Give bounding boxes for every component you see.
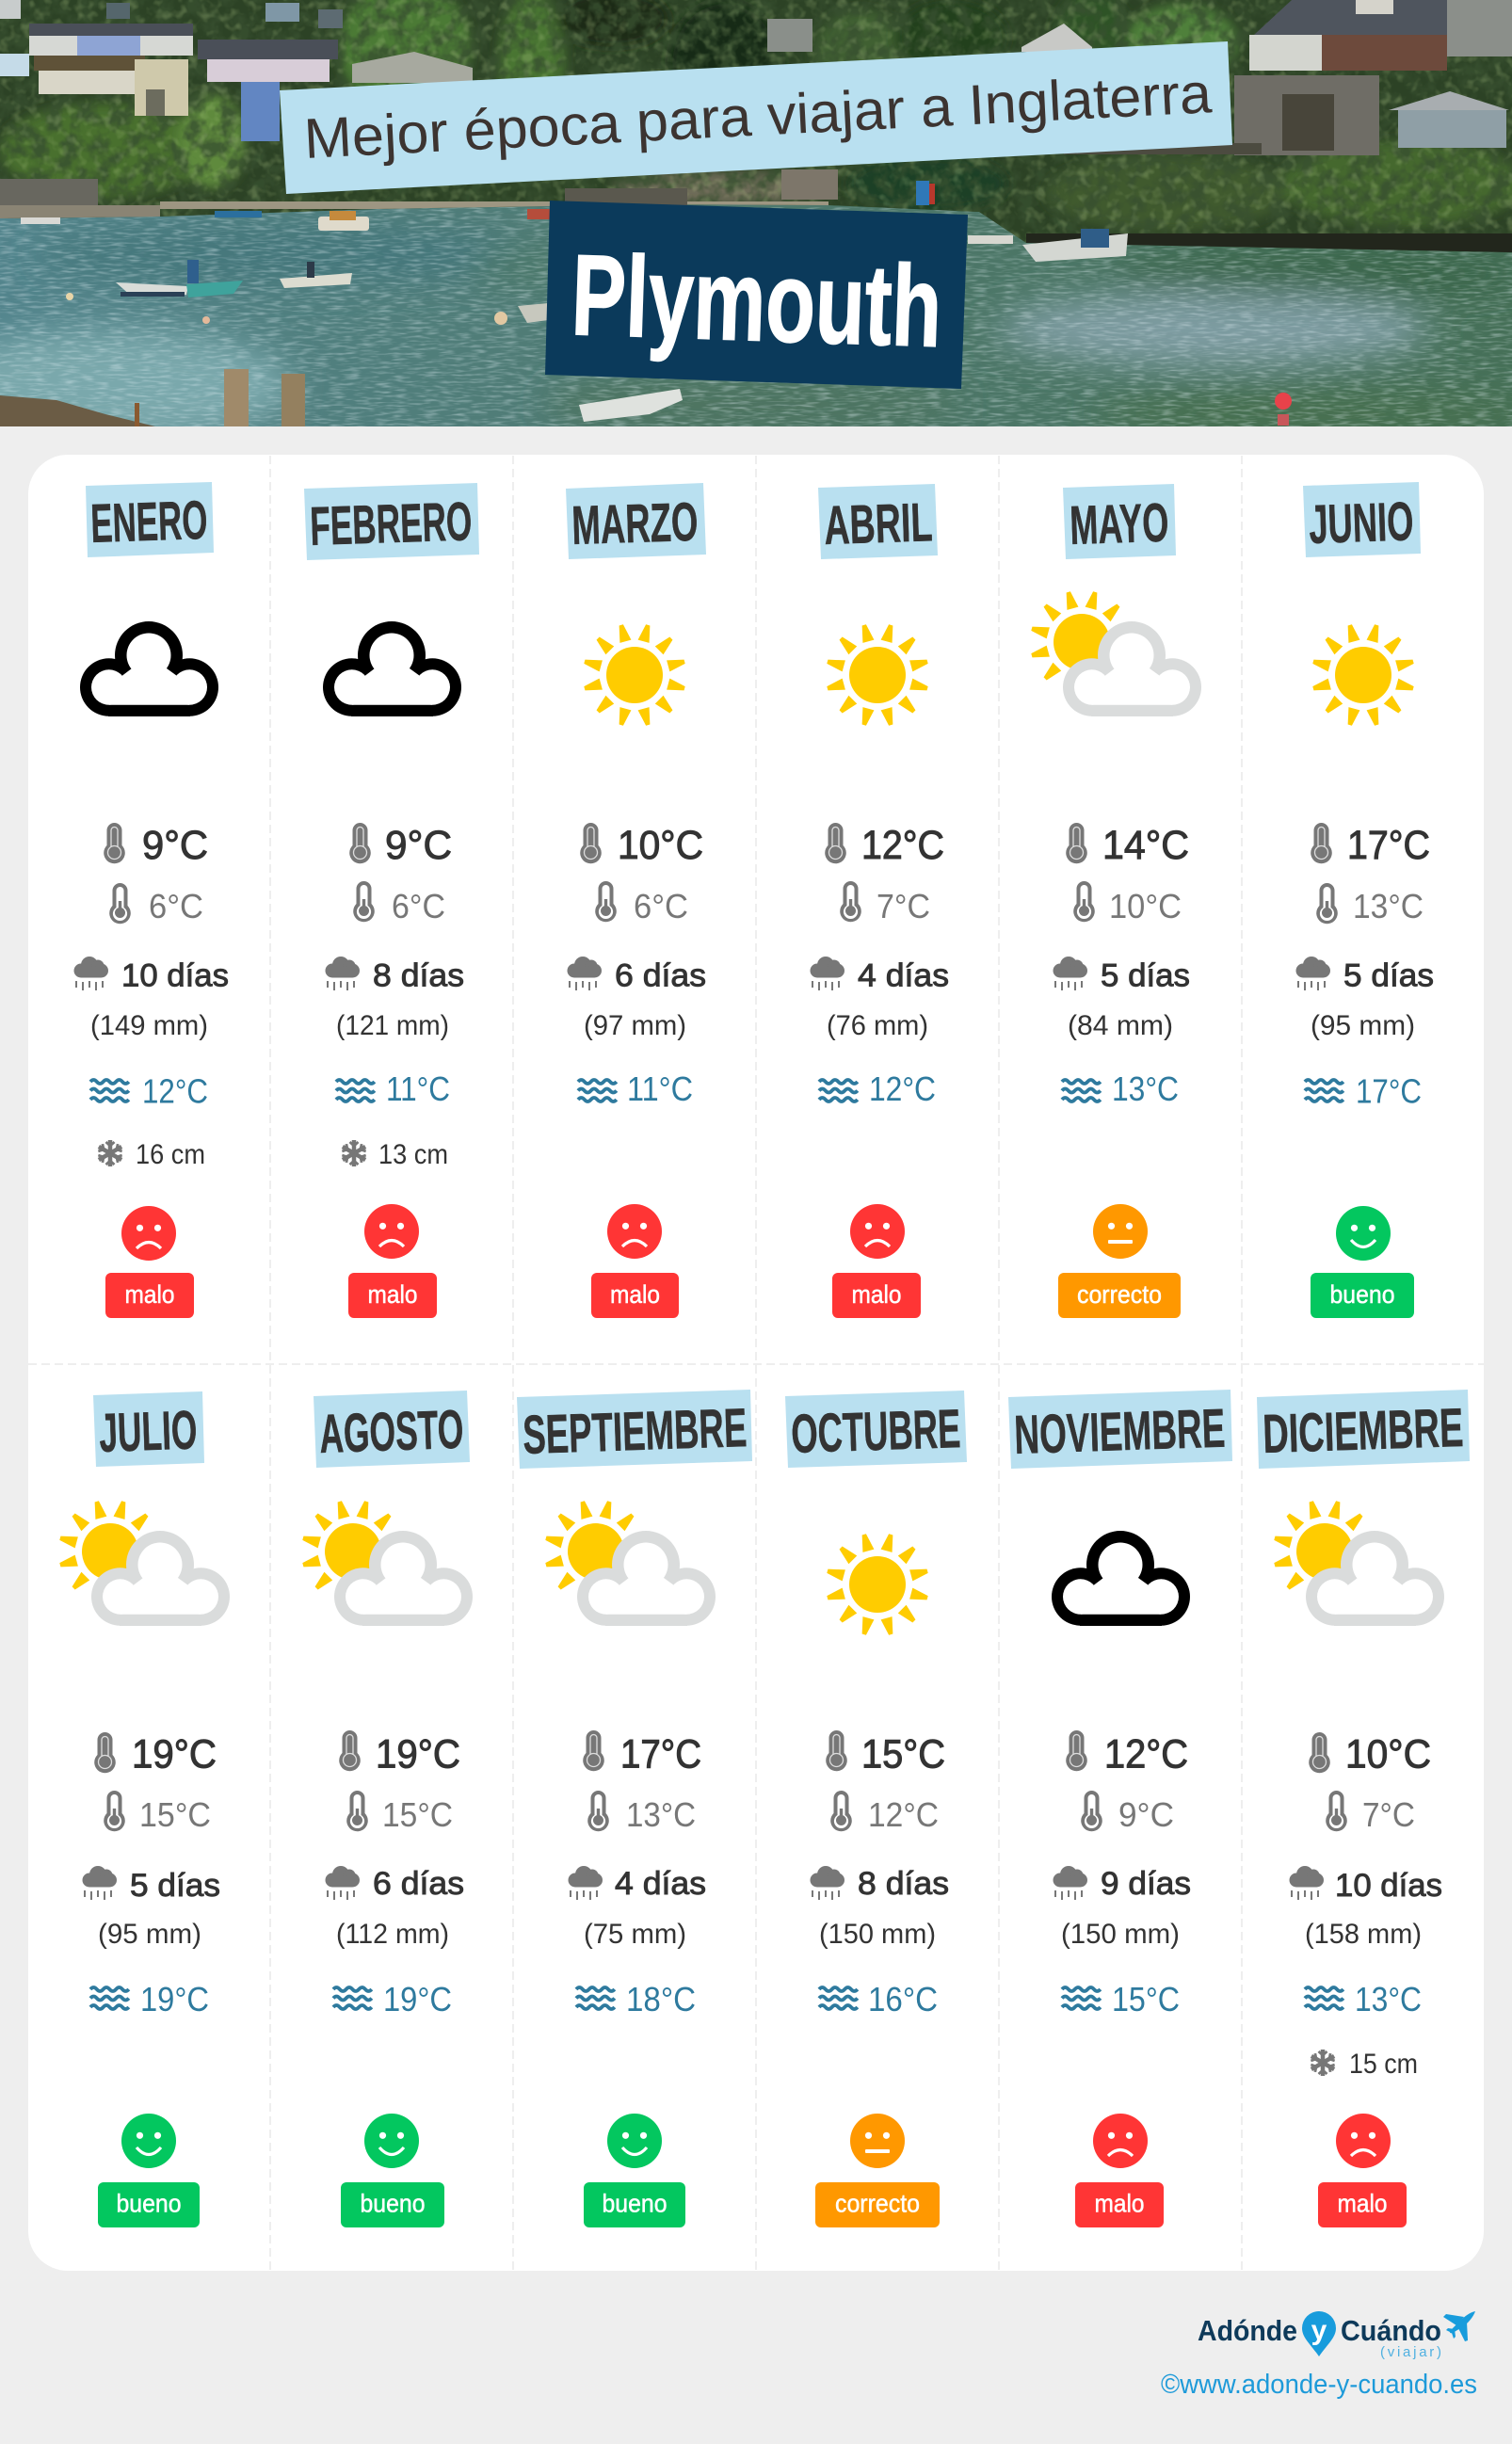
rainy days (567, 957, 706, 994)
min temperature (595, 881, 688, 925)
max temperature (94, 1732, 217, 1777)
panel: junio (1295, 482, 1434, 1318)
rainfall: (84 mm) (1068, 1010, 1173, 1041)
sea temperature (336, 1069, 450, 1108)
rating badge: bueno (584, 2182, 685, 2227)
rainfall: (76 mm) (827, 1010, 928, 1041)
icon: sun behind grey cloud (58, 1500, 230, 1626)
panel: enero (73, 482, 229, 1318)
footer logo: Adónde y Cuándo (viajar): (viajar) (1380, 2344, 1441, 2360)
rating face (1093, 1204, 1148, 1259)
max temperature: 9°C (142, 823, 208, 868)
sea temperature: 15°C (1112, 1980, 1180, 2018)
rainy days: 4 días (615, 1866, 706, 1902)
icon: airplane (1443, 2311, 1475, 2341)
right houses (1064, 0, 1512, 155)
month label: ENERO: ENERO (89, 490, 208, 555)
max temperature: 19°C (376, 1732, 460, 1777)
panel: septiembre (517, 1390, 752, 2227)
min temperature: 6°C (392, 887, 445, 925)
max temperature: 12°C (1104, 1732, 1188, 1777)
min temperature: 6°C (149, 887, 203, 925)
max temperature: 15°C (861, 1732, 945, 1777)
icon: location pin with y (1302, 2311, 1336, 2356)
rating face (607, 1204, 662, 1259)
min temperature: 12°C (868, 1795, 939, 1834)
icon: sun (826, 623, 929, 727)
rainy days: 6 días (615, 958, 706, 994)
month label: OCTUBRE: OCTUBRE (790, 1398, 961, 1465)
hero photo: harbour with boats and houses (0, 0, 1512, 442)
month label: OCTUBRE (785, 1391, 967, 1468)
min temperature: 7°C (1362, 1795, 1415, 1834)
rainy days (83, 1866, 220, 1904)
max temperature: 17°C (1347, 823, 1430, 868)
month label: JULIO: JULIO (98, 1399, 198, 1464)
month label: AGOSTO: AGOSTO (318, 1399, 464, 1465)
month label: NOVIEMBRE (1008, 1390, 1232, 1469)
rating badge: malo: malo (1337, 2190, 1388, 2218)
rainfall: (158 mm) (1305, 1919, 1422, 1950)
max temperature (1311, 823, 1430, 868)
min temperature (1073, 881, 1182, 925)
footer logo: Adónde y Cuándo (viajar) (1198, 2311, 1475, 2360)
footer logo: Adónde y Cuándo (viajar): Cuándo (1341, 2314, 1441, 2347)
max temperature (825, 823, 944, 868)
sea temperature: 19°C (140, 1980, 209, 2018)
icon: sun (1311, 623, 1415, 727)
rating badge: correcto (815, 2182, 940, 2227)
rating badge: malo: malo (851, 1280, 902, 1309)
rating badge: malo (348, 1273, 437, 1318)
sea temperature: 12°C (142, 1071, 208, 1111)
rating face (1336, 2114, 1391, 2168)
rating face (850, 1204, 905, 1259)
max temperature (1309, 1732, 1431, 1777)
rating badge: bueno (341, 2182, 444, 2227)
sea temperature: 12°C (869, 1069, 936, 1108)
month label: MARZO (566, 483, 706, 559)
sea temperature (819, 1980, 938, 2018)
snow: 13 cm (378, 1139, 448, 1170)
rating badge: malo (1075, 2182, 1164, 2227)
rating badge: malo: malo (124, 1280, 175, 1309)
rating badge: bueno (98, 2182, 200, 2227)
min temperature: 13°C (626, 1795, 696, 1834)
snow (341, 1139, 448, 1170)
sea temperature: 13°C (1112, 1069, 1179, 1108)
month label: SEPTIEMBRE (517, 1390, 752, 1469)
snow: 15 cm (1349, 2049, 1418, 2080)
rating badge: malo: malo (1094, 2190, 1145, 2218)
min temperature (1081, 1791, 1174, 1834)
rainy days (326, 1866, 464, 1902)
rainy days (810, 1866, 949, 1902)
rating badge: correcto: correcto (1077, 1280, 1162, 1309)
main white calendar panel (28, 455, 1484, 2271)
max temperature (1066, 823, 1189, 868)
rating face (607, 2114, 662, 2168)
sea temperature: 11°C (627, 1069, 693, 1108)
min temperature: 7°C (877, 887, 930, 925)
sea temperature (1305, 1980, 1422, 2018)
sea temperature: 13°C (1355, 1980, 1422, 2018)
boats and moorings (0, 209, 1292, 426)
icon: sun (583, 623, 686, 727)
rating badge: correcto (1058, 1273, 1181, 1318)
month label: JUNIO (1303, 482, 1421, 557)
rainy days (1053, 1866, 1191, 1902)
month label: MAYO (1063, 484, 1176, 559)
rainy days (326, 957, 464, 994)
rainy days: 5 días (130, 1868, 220, 1904)
rating badge: bueno: bueno (1329, 1280, 1395, 1309)
city banner: Plymouth (545, 201, 968, 389)
sea temperature (578, 1069, 693, 1108)
icon: location pin with y: y (1311, 2315, 1327, 2346)
sea temperature (1305, 1071, 1422, 1111)
min temperature: 15°C (382, 1795, 453, 1834)
min temperature: 6°C (634, 887, 688, 925)
rating face (121, 1206, 176, 1261)
rainy days: 10 días (121, 958, 229, 994)
panel: julio (58, 1391, 230, 2227)
min temperature: 15°C (139, 1795, 211, 1834)
icon: black cloud (80, 621, 218, 716)
rating badge: malo (832, 1273, 921, 1318)
rating face (1093, 2114, 1148, 2168)
icon: sun behind grey cloud (1273, 1500, 1444, 1626)
month label: NOVIEMBRE: NOVIEMBRE (1013, 1398, 1226, 1466)
max temperature (826, 1730, 945, 1777)
min temperature: 9°C (1118, 1795, 1174, 1834)
rainy days: 8 días (858, 1866, 949, 1902)
icon: sun behind grey cloud (1030, 590, 1201, 716)
panel: diciembre (1257, 1390, 1470, 2227)
sea temperature: 18°C (626, 1980, 696, 2018)
rainy days: 8 días (373, 958, 464, 994)
month label: MARZO: MARZO (571, 491, 699, 556)
rainy days (1053, 957, 1190, 994)
snow: 16 cm (136, 1139, 205, 1170)
month label: ENERO (86, 482, 214, 557)
footer logo: Adónde y Cuándo (viajar): Adónde (1198, 2314, 1297, 2347)
panel: febrero (304, 483, 479, 1318)
rating badge: correcto: correcto (835, 2190, 920, 2218)
panel: marzo (566, 483, 706, 1318)
max temperature: 12°C (861, 823, 944, 868)
month label: AGOSTO (314, 1391, 470, 1468)
panel: agosto (301, 1391, 473, 2227)
max temperature: 10°C (618, 823, 703, 868)
rainy days: 4 días (858, 958, 949, 994)
sea temperature: 17°C (1356, 1071, 1422, 1111)
rainy days: 10 días (1335, 1868, 1442, 1904)
panel: mayo (1030, 484, 1201, 1318)
sea temperature: 11°C (386, 1069, 450, 1108)
rating badge: malo (591, 1273, 679, 1318)
max temperature (583, 1730, 701, 1777)
month label: JULIO (93, 1391, 204, 1467)
min temperature: 10°C (1109, 887, 1182, 925)
max temperature (339, 1730, 460, 1777)
rating face (850, 2114, 905, 2168)
min temperature (346, 1791, 453, 1834)
rainy days: 6 días (373, 1866, 464, 1902)
month label: FEBRERO (304, 483, 479, 560)
month label: MAYO: MAYO (1069, 492, 1169, 556)
rainy days (810, 957, 949, 994)
title banner: Mejor época para viajar a Inglaterra: Mejor época para viajar a Inglaterra (302, 61, 1214, 170)
rainfall: (112 mm) (336, 1919, 449, 1950)
rating face (1336, 1206, 1391, 1261)
rating badge: bueno: bueno (360, 2190, 426, 2218)
sea temperature (576, 1980, 696, 2018)
max temperature: 10°C (1345, 1732, 1431, 1777)
month label: ABRIL (818, 484, 938, 559)
max temperature (580, 823, 703, 868)
rainfall: (150 mm) (1061, 1919, 1180, 1950)
max temperature (104, 823, 208, 868)
rainfall: (97 mm) (584, 1010, 686, 1041)
max temperature: 19°C (132, 1732, 217, 1777)
month label: FEBRERO: FEBRERO (309, 490, 473, 557)
rainfall: (149 mm) (90, 1010, 208, 1041)
title banner: Mejor época para viajar a Inglaterra (280, 41, 1232, 194)
rating badge: malo: malo (610, 1280, 660, 1309)
panel: abril (810, 484, 949, 1318)
min temperature (109, 883, 203, 925)
rainy days (1290, 1866, 1442, 1904)
rating badge: malo (105, 1273, 194, 1318)
sea temperature: 19°C (383, 1980, 452, 2018)
sea temperature (90, 1980, 209, 2018)
footer website: ©www.adonde-y-cuando.es (1161, 2370, 1477, 2400)
min temperature (587, 1791, 696, 1834)
min temperature (1316, 883, 1424, 925)
rating badge: malo (1318, 2182, 1407, 2227)
max temperature (349, 823, 452, 868)
rainy days (73, 957, 229, 994)
rainy days: 5 días (1101, 958, 1190, 994)
min temperature (353, 881, 445, 925)
icon: black cloud (323, 621, 461, 716)
rainfall: (75 mm) (584, 1919, 686, 1950)
rating badge: bueno: bueno (603, 2190, 667, 2218)
icon: sun (826, 1533, 929, 1636)
rating face (364, 2114, 419, 2168)
min temperature (104, 1791, 211, 1834)
rating badge: bueno: bueno (117, 2190, 181, 2218)
rating face (364, 1204, 419, 1259)
rainy days (1295, 957, 1434, 994)
month label: ABRIL: ABRIL (823, 491, 933, 556)
sea temperature (819, 1069, 936, 1108)
month label: JUNIO: JUNIO (1308, 490, 1414, 555)
rating badge: malo: malo (367, 1280, 418, 1309)
rating face (121, 2114, 176, 2168)
sea temperature (1062, 1069, 1179, 1108)
min temperature (840, 881, 930, 925)
max temperature (1066, 1730, 1188, 1777)
panel: octubre (785, 1391, 967, 2227)
sea temperature: 16°C (868, 1980, 938, 2018)
rainfall: (150 mm) (819, 1919, 936, 1950)
max temperature: 14°C (1102, 823, 1189, 868)
rainfall: (95 mm) (1311, 1010, 1415, 1041)
min temperature (1326, 1791, 1415, 1834)
sea temperature (1062, 1980, 1180, 2018)
icon: sun behind grey cloud (544, 1500, 716, 1626)
snow (1310, 2049, 1418, 2080)
rainy days (569, 1866, 706, 1902)
rainy days: 9 días (1101, 1866, 1191, 1902)
month label: SEPTIEMBRE: SEPTIEMBRE (522, 1397, 748, 1466)
rating badge: bueno (1311, 1273, 1414, 1318)
max temperature: 17°C (620, 1732, 701, 1777)
rainfall: (95 mm) (98, 1919, 201, 1950)
city banner: Plymouth: Plymouth (570, 231, 943, 371)
sea temperature (333, 1980, 452, 2018)
icon: black cloud (1052, 1531, 1190, 1626)
panel: noviembre (1008, 1390, 1232, 2227)
sea temperature (90, 1071, 208, 1111)
rainy days: 5 días (1343, 958, 1434, 994)
left houses (0, 0, 1092, 205)
min temperature: 13°C (1353, 887, 1424, 925)
icon: sun behind grey cloud (301, 1500, 473, 1626)
rainfall: (121 mm) (336, 1010, 449, 1041)
snow (97, 1139, 205, 1170)
max temperature: 9°C (385, 823, 452, 868)
min temperature (830, 1791, 939, 1834)
